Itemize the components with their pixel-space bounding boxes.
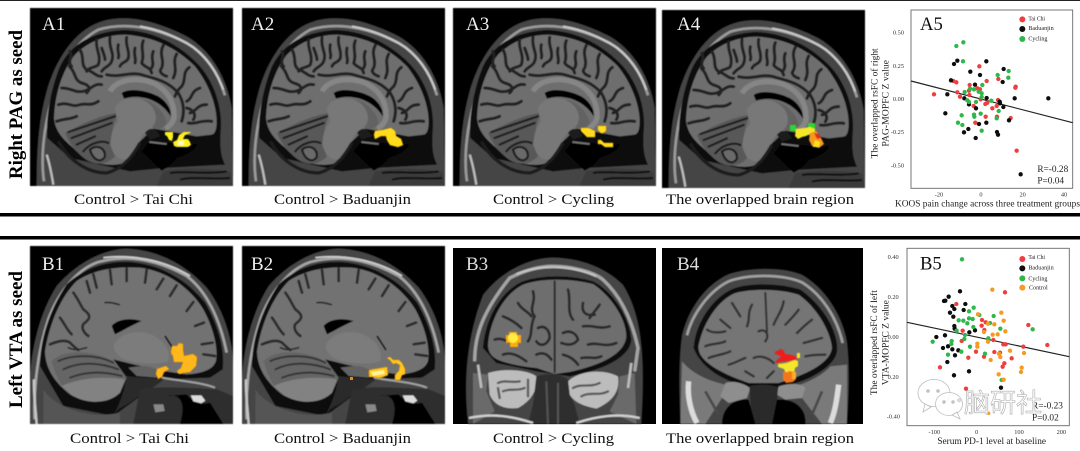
y ticks B5: -0.40: [887, 414, 900, 421]
stats A5: [1037, 165, 1069, 186]
panel A3: [453, 8, 656, 208]
y ticks A5: 0.00: [893, 96, 904, 103]
stats B5: R=-0.23: [1032, 402, 1063, 412]
x ticks B5: 0: [975, 429, 978, 436]
watermark: text: 脑研社: [964, 383, 1042, 420]
x ticks B5: 200: [1057, 429, 1066, 436]
stats A5: P=0.04: [1037, 176, 1064, 186]
activation B3: [506, 332, 521, 347]
y axis title B5: VTA-MOPFC Z value: [880, 300, 890, 385]
stats B5: P=0.02: [1032, 413, 1059, 423]
x ticks A5: 20: [1020, 191, 1026, 198]
label A3: A3: [466, 14, 489, 35]
legend B5: Control: [1029, 284, 1048, 291]
scatter plot A5: [870, 10, 1080, 208]
coronal brain B3: [466, 257, 643, 424]
activation A3: [581, 126, 613, 147]
y axis title A5: [870, 48, 890, 158]
red points B5: [938, 290, 1049, 391]
caption B1: Control > Tai Chi: [70, 431, 189, 447]
label A2: A2: [251, 14, 274, 35]
y ticks B5: 0.00: [888, 334, 899, 341]
orange points B5: [975, 287, 1026, 415]
legend B5: Tai Chi: [1028, 254, 1045, 261]
row heading: Right PAG as seed: Right PAG as seed: [7, 29, 27, 179]
x ticks A5: 40: [1061, 191, 1067, 198]
caption A2: Control > Baduanjin: [274, 192, 412, 208]
panel B3: [453, 248, 656, 447]
y axis title B5: [869, 290, 890, 395]
y ticks A5: 0.25: [893, 63, 904, 70]
y axis title A5: PAG-MOPFC Z value: [880, 60, 890, 147]
label A4: A4: [677, 14, 701, 35]
stats B5: [1032, 402, 1063, 423]
panel B1: [30, 246, 233, 447]
label B1: B1: [42, 254, 64, 275]
row divider bars: [0, 213, 1080, 240]
coronal brain B4: [679, 269, 849, 424]
y ticks A5: -0.50: [891, 162, 904, 169]
legend A5: [1019, 16, 1054, 42]
x axis title A5: KOOS pain change across three treatment groups: [895, 198, 1080, 208]
y axis title A5: The overlapped rsFC of right: [870, 48, 880, 158]
panel B4: [662, 248, 863, 447]
x ticks A5: [935, 191, 1067, 198]
legend B5: Cycling: [1028, 275, 1048, 282]
panel A1: [30, 8, 233, 208]
green points A5: [954, 40, 1011, 133]
activation A1: [165, 132, 191, 147]
panel A2: [242, 8, 445, 208]
green points B5: [930, 257, 1035, 382]
activation B4 overlap: [775, 349, 800, 383]
x ticks B5: 100: [1014, 429, 1024, 436]
label B3: B3: [466, 254, 488, 275]
x ticks A5: -20: [935, 191, 943, 198]
label B4: B4: [677, 254, 700, 275]
legend A5: Baduanjin: [1028, 25, 1054, 32]
y axis title B5: The overlapped rsFC of left: [869, 290, 879, 395]
y ticks A5: [891, 30, 904, 169]
activation A4 overlap: [790, 123, 824, 148]
legend A5: Cycling: [1028, 35, 1048, 42]
caption A4: The overlapped brain region: [666, 192, 855, 208]
caption B3: Control > Cycling: [493, 431, 615, 447]
caption A3: Control > Cycling: [493, 192, 615, 208]
activation B2: [369, 357, 405, 380]
y ticks B5: 0.20: [888, 294, 899, 301]
red points A5: [932, 64, 1019, 153]
scatter plot B5: [869, 248, 1069, 446]
legend B5: [1019, 254, 1054, 291]
panel label A5: A5: [920, 14, 943, 35]
black points A5: [943, 58, 1050, 176]
black points B5: [934, 289, 1003, 402]
legend A5: Tai Chi: [1028, 16, 1045, 23]
legend B5: Baduanjin: [1028, 265, 1054, 272]
label A1: A1: [42, 14, 65, 35]
activation B1: [156, 343, 197, 379]
x ticks A5: 0: [979, 191, 983, 198]
caption A1: Control > Tai Chi: [74, 192, 193, 208]
x ticks B5: [929, 429, 1066, 436]
activation A2: [374, 128, 403, 147]
watermark: WeChat logo: [918, 380, 962, 419]
label B2: B2: [251, 254, 273, 275]
panel B2: [242, 246, 445, 447]
panel A4: [662, 10, 865, 208]
stats A5: R=-0.28: [1037, 165, 1069, 175]
x axis title B5: Serum PD-1 level at baseline: [937, 436, 1046, 446]
caption B2: Control > Baduanjin: [274, 431, 412, 447]
y ticks B5: [887, 254, 900, 421]
panel label B5: B5: [920, 253, 942, 274]
y ticks A5: 0.50: [893, 30, 904, 37]
y ticks A5: -0.25: [891, 129, 904, 136]
x ticks B5: -100: [929, 429, 940, 436]
y ticks B5: 0.40: [888, 254, 899, 261]
caption B4: The overlapped brain region: [666, 431, 855, 447]
regression line B5: [907, 322, 1069, 357]
regression line A5: [911, 81, 1073, 123]
row heading: Left VTA as seed: Left VTA as seed: [7, 270, 27, 408]
y ticks B5: 0.20: [888, 374, 899, 381]
